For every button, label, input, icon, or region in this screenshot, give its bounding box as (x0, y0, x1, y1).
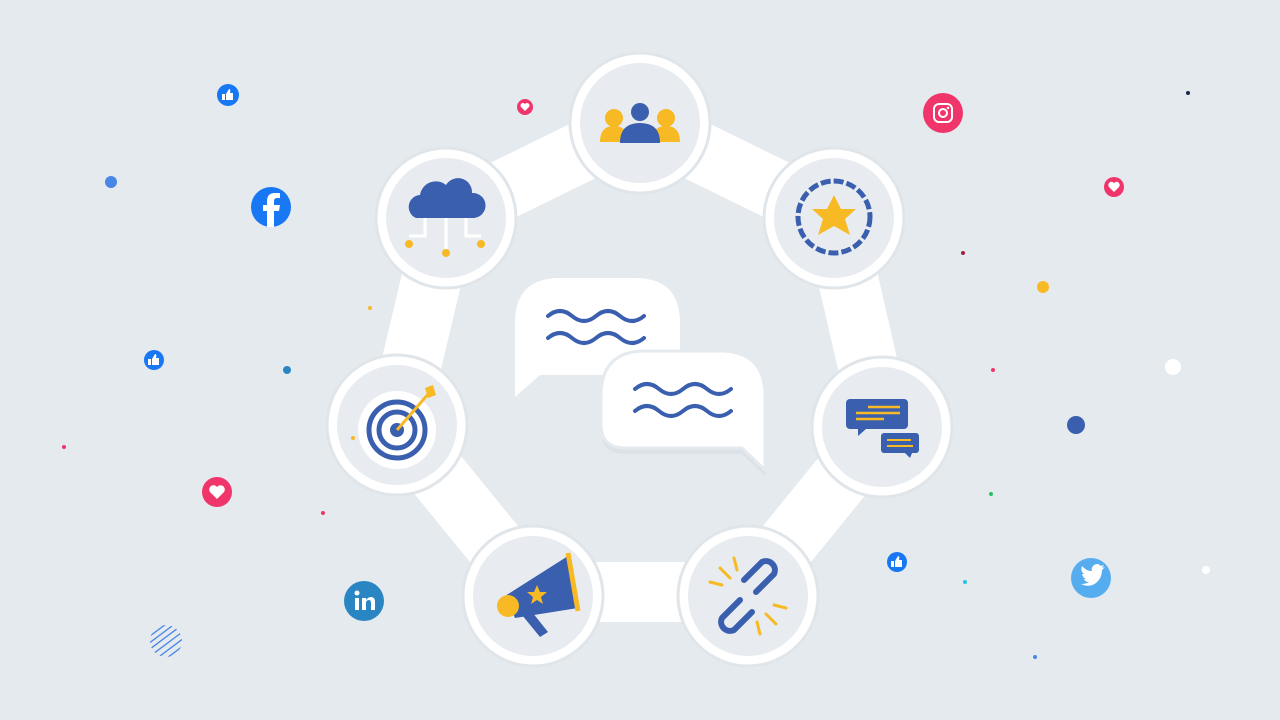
icon: twitter (1071, 558, 1111, 598)
icon: linkedin (344, 581, 384, 621)
icons: hearts (202, 99, 1124, 507)
center speech bubbles (515, 278, 765, 476)
circle: chat messages (812, 357, 952, 497)
striped circle (150, 625, 182, 657)
circle: broken link (678, 526, 818, 666)
infographic canvas (62, 54, 1210, 664)
icons: likes (144, 84, 907, 572)
circle: cloud (376, 148, 516, 288)
decorative dots (62, 91, 1210, 659)
ring band connecting circles (397, 123, 882, 592)
circle: target (327, 355, 467, 495)
circle: megaphone (463, 526, 603, 666)
icon: instagram (923, 93, 963, 133)
circle: team (570, 53, 710, 193)
circle: badge star (764, 148, 904, 288)
icon: facebook (251, 187, 291, 227)
